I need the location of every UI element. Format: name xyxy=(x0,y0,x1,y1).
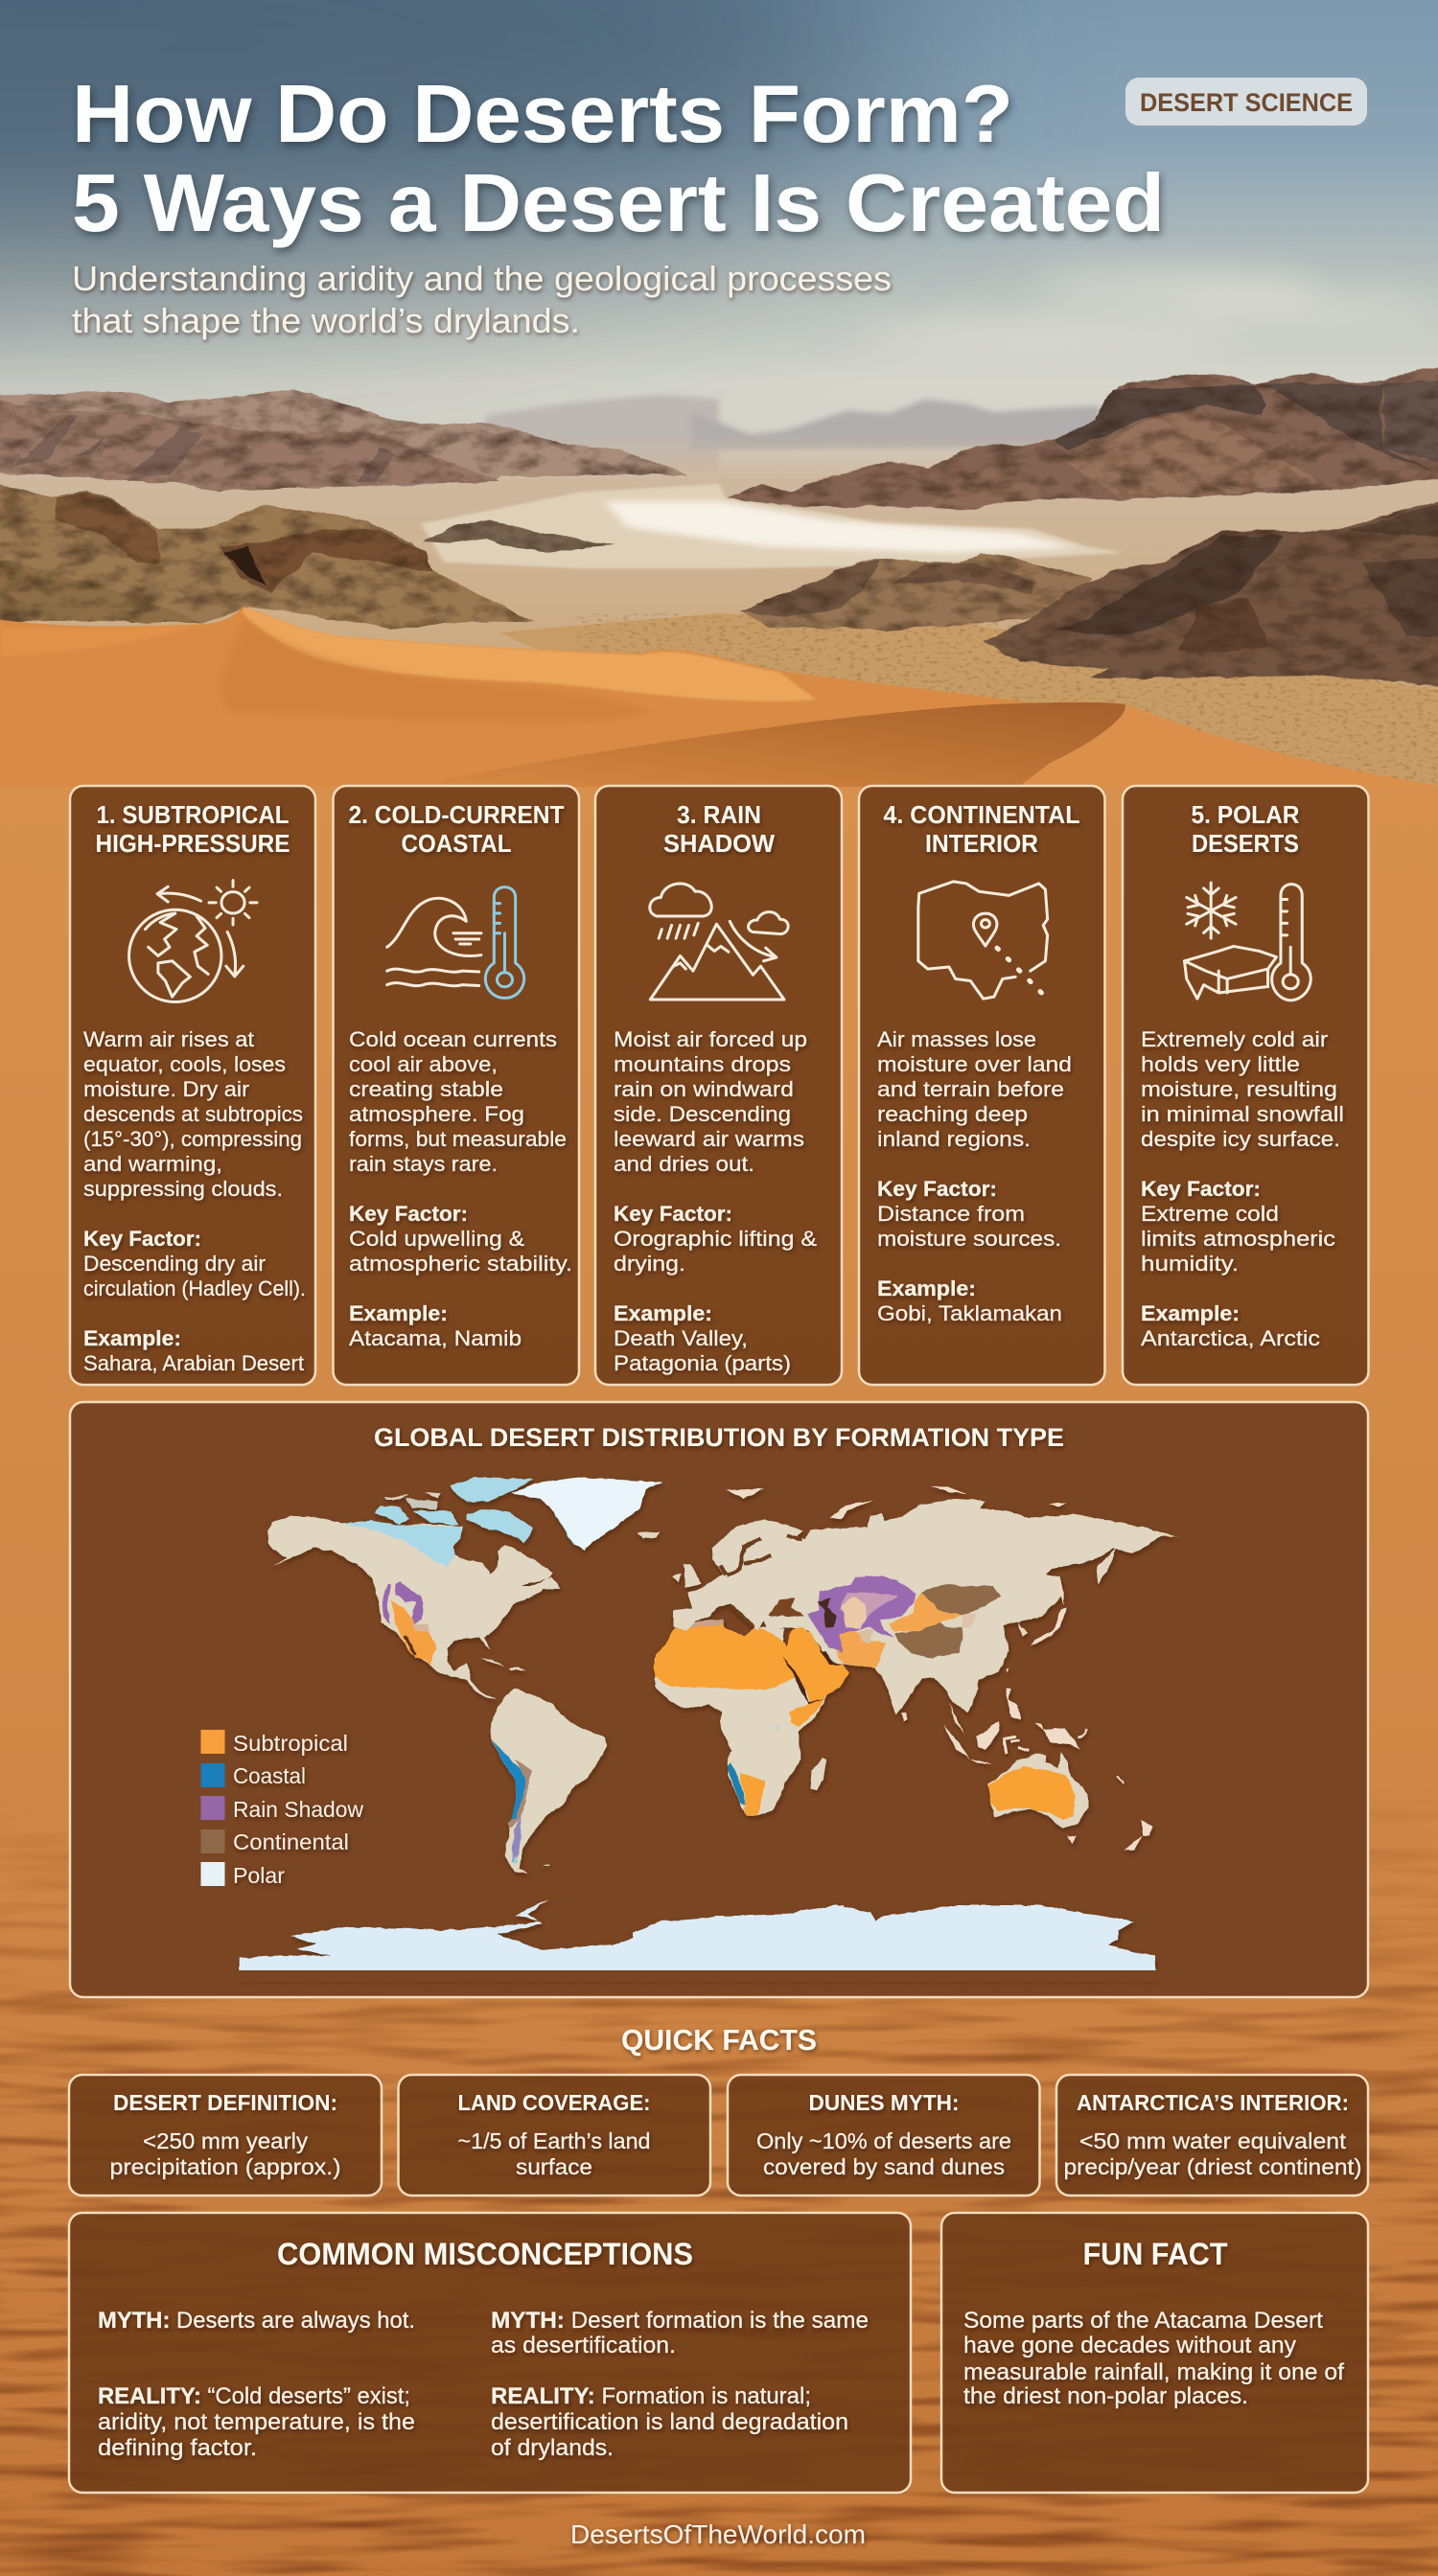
card heading xyxy=(663,800,775,858)
body text: Sahara, Arabian Desert xyxy=(83,1351,304,1375)
body text: Example: xyxy=(83,1326,181,1350)
card heading: 1. SUBTROPICAL xyxy=(96,800,290,829)
title: 5 Ways a Desert Is Created xyxy=(72,158,1165,249)
sand background xyxy=(0,787,1438,2576)
fun fact text: have gone decades without any xyxy=(963,2333,1296,2358)
icon: continent with location pin xyxy=(918,882,1048,999)
map heading: GLOBAL DESERT DISTRIBUTION BY FORMATION TYPE xyxy=(374,1423,1064,1452)
fun fact text: the driest non-polar places. xyxy=(963,2383,1248,2409)
body text: reaching deep xyxy=(877,1102,1028,1126)
card heading xyxy=(1191,800,1300,858)
stippled plain xyxy=(499,613,1438,736)
body text: Death Valley, xyxy=(614,1326,748,1350)
panel: 1 subtropical high-pressure xyxy=(70,786,315,1385)
body text: equator, cools, loses xyxy=(83,1052,286,1076)
footer: DesertsOfTheWorld.com xyxy=(570,2519,866,2549)
body text: Key Factor: xyxy=(1141,1177,1261,1201)
body text: forms, but measurable xyxy=(349,1127,567,1151)
card heading: 4. CONTINENTAL xyxy=(884,800,1080,829)
body text: limits atmospheric xyxy=(1141,1227,1335,1251)
body text: suppressing clouds. xyxy=(83,1177,283,1201)
map legend: Continental xyxy=(233,1829,349,1854)
title: How Do Deserts Form? xyxy=(72,69,1013,160)
body text: Moist air forced up xyxy=(614,1027,807,1051)
map legend: Rain Shadow xyxy=(233,1797,363,1822)
body text: atmospheric stability. xyxy=(349,1252,572,1276)
myth and reality text: desertification is land degradation xyxy=(491,2409,848,2435)
panel: 5 polar deserts xyxy=(1123,786,1369,1385)
panel: 2 cold-current coastal xyxy=(334,786,579,1385)
panel: antarctica's interior fact: <50 mm water equivalent xyxy=(1079,2128,1347,2153)
body text: holds very little xyxy=(1141,1052,1300,1076)
body text: inland regions. xyxy=(877,1127,1031,1151)
body text: Example: xyxy=(349,1301,448,1325)
fun fact heading: FUN FACT xyxy=(1083,2237,1228,2271)
body text: despite icy surface. xyxy=(1141,1127,1340,1151)
body text: Cold ocean currents xyxy=(349,1027,557,1051)
body text: Cold upwelling & xyxy=(349,1227,524,1251)
body text: creating stable xyxy=(349,1077,503,1101)
body text: descends at subtropics xyxy=(83,1102,303,1126)
icon: snowflake, ice and thermometer xyxy=(1185,883,1310,1000)
body text xyxy=(83,1027,306,1375)
title xyxy=(72,69,1165,249)
body text: Extreme cold xyxy=(1141,1202,1279,1226)
africa xyxy=(655,1619,827,1816)
body text: moisture sources. xyxy=(877,1227,1061,1251)
panel: desert definition fact: precipitation (approx.) xyxy=(109,2154,341,2179)
map legend: Subtropical xyxy=(233,1731,348,1756)
body text: and dries out. xyxy=(614,1152,754,1176)
body text: Air masses lose xyxy=(877,1027,1036,1051)
panel: antarctica's interior fact xyxy=(1056,2075,1368,2196)
body text: circulation (Hadley Cell). xyxy=(83,1276,306,1300)
body text: rain on windward xyxy=(614,1077,794,1101)
panel: desert definition fact xyxy=(69,2075,382,2196)
body text xyxy=(877,1027,1072,1325)
panel: desert definition fact: DESERT DEFINITION: xyxy=(113,2090,337,2115)
body text: Example: xyxy=(877,1276,976,1300)
myth and reality text: MYTH: Deserts are always hot. xyxy=(98,2308,415,2334)
body text: side. Descending xyxy=(614,1102,791,1126)
icon: wave and thermometer xyxy=(387,887,524,998)
body text: atmosphere. Fog xyxy=(349,1102,524,1126)
card heading: INTERIOR xyxy=(925,829,1038,858)
panel: 3 rain shadow xyxy=(595,786,842,1385)
card background xyxy=(334,786,579,1385)
panel: antarctica's interior fact: ANTARCTICA’S INTERIOR: xyxy=(1077,2090,1349,2115)
myth and reality text: REALITY: Formation is natural; xyxy=(491,2383,811,2409)
oceania xyxy=(988,1723,1153,1851)
card heading xyxy=(96,800,290,858)
body text: humidity. xyxy=(1141,1252,1239,1276)
card background xyxy=(859,786,1104,1385)
far haze ridges xyxy=(486,395,1100,474)
body text xyxy=(1141,1027,1344,1350)
subtitle: that shape the world’s drylands. xyxy=(72,301,580,340)
fun fact text xyxy=(963,2308,1344,2409)
map legend xyxy=(201,1730,363,1888)
body text: Distance from xyxy=(877,1202,1025,1226)
badge: desert science xyxy=(1125,78,1367,126)
panel: 4 continental interior xyxy=(859,786,1104,1385)
panel: land coverage fact: LAND COVERAGE: xyxy=(458,2090,650,2115)
body text: mountains drops xyxy=(614,1052,791,1076)
map legend: Polar xyxy=(233,1863,285,1888)
panel: dunes myth fact: covered by sand dunes xyxy=(763,2154,1005,2179)
badge: desert science: DESERT SCIENCE xyxy=(1140,88,1353,117)
misconceptions heading: COMMON MISCONCEPTIONS xyxy=(277,2237,693,2271)
card heading: COASTAL xyxy=(401,829,512,858)
body text: drying. xyxy=(614,1252,685,1276)
body text xyxy=(349,1027,572,1350)
eurasia xyxy=(672,1486,1178,1764)
panel: fun fact xyxy=(941,2213,1368,2493)
rock masses xyxy=(0,366,1438,690)
body text: Key Factor: xyxy=(349,1202,468,1226)
myth and reality text: aridity, not temperature, is the xyxy=(98,2409,415,2435)
body text: in minimal snowfall xyxy=(1141,1102,1344,1126)
body text: Extremely cold air xyxy=(1141,1027,1328,1051)
americas and greenland xyxy=(267,1478,663,1874)
body text: leeward air warms xyxy=(614,1127,804,1151)
body text: Antarctica, Arctic xyxy=(1141,1326,1320,1350)
panel: antarctica's interior fact: precip/year (driest continent) xyxy=(1064,2154,1361,2179)
subtitle: Understanding aridity and the geological processes xyxy=(72,259,892,298)
panel: land coverage fact: surface xyxy=(516,2154,592,2179)
card heading: SHADOW xyxy=(663,829,775,858)
myth and reality text xyxy=(98,2308,869,2461)
salt flat xyxy=(421,484,1123,568)
panel: dunes myth fact: Only ~10% of deserts are xyxy=(756,2128,1011,2153)
card background xyxy=(595,786,842,1385)
body text: (15°-30°), compressing xyxy=(83,1127,302,1151)
body text: moisture. Dry air xyxy=(83,1077,249,1101)
antarctica xyxy=(239,1898,1156,1978)
panel: dunes myth fact: DUNES MYTH: xyxy=(809,2090,959,2115)
body text: Key Factor: xyxy=(614,1202,732,1226)
panel: land coverage fact: ~1/5 of Earth’s land xyxy=(458,2128,650,2153)
body text: and warming, xyxy=(83,1152,222,1176)
icon: globe and sun xyxy=(129,881,257,1001)
quick facts heading: QUICK FACTS xyxy=(621,2023,817,2057)
body text: Descending dry air xyxy=(83,1252,266,1276)
card heading: DESERTS xyxy=(1192,829,1299,858)
body text: moisture over land xyxy=(877,1052,1072,1076)
hero desert landscape xyxy=(0,0,1438,798)
body text: Key Factor: xyxy=(877,1177,997,1201)
body text: Orographic lifting & xyxy=(614,1227,817,1251)
myth and reality text: REALITY: “Cold deserts” exist; xyxy=(98,2383,410,2409)
myth and reality text: as desertification. xyxy=(491,2333,676,2358)
card background xyxy=(70,786,315,1385)
card heading: 3. RAIN xyxy=(677,800,761,829)
panel: common misconceptions xyxy=(69,2213,911,2493)
body text: Warm air rises at xyxy=(83,1027,254,1051)
body text: Key Factor: xyxy=(83,1227,201,1251)
body text: Example: xyxy=(614,1301,712,1325)
panel: global distribution map xyxy=(70,1402,1368,1997)
body text: Example: xyxy=(1141,1301,1240,1325)
body text: Gobi, Taklamakan xyxy=(877,1301,1062,1325)
card heading xyxy=(884,800,1080,858)
body text xyxy=(614,1027,817,1375)
card heading xyxy=(349,800,565,858)
icon: cloud and mountains xyxy=(650,884,788,1000)
map legend: Coastal xyxy=(233,1763,306,1788)
myth and reality text: MYTH: Desert formation is the same xyxy=(491,2308,869,2334)
subtitle xyxy=(72,259,892,340)
body text: and terrain before xyxy=(877,1077,1064,1101)
card background xyxy=(1123,786,1369,1385)
myth and reality text: of drylands. xyxy=(491,2435,614,2461)
world map xyxy=(239,1478,1178,1978)
body text: Patagonia (parts) xyxy=(614,1351,791,1375)
card heading: 5. POLAR xyxy=(1191,800,1300,829)
myth and reality text: defining factor. xyxy=(98,2435,257,2461)
map panel background xyxy=(70,1402,1368,1997)
card heading: HIGH-PRESSURE xyxy=(96,829,290,858)
card heading: 2. COLD-CURRENT xyxy=(349,800,565,829)
fun fact text: Some parts of the Atacama Desert xyxy=(963,2308,1323,2334)
body text: rain stays rare. xyxy=(349,1152,498,1176)
panel: dunes myth fact xyxy=(728,2075,1039,2196)
body text: moisture, resulting xyxy=(1141,1077,1337,1101)
panel: land coverage fact xyxy=(399,2075,710,2196)
body text: Atacama, Namib xyxy=(349,1326,522,1350)
dunes xyxy=(0,607,1032,798)
fun fact text: measurable rainfall, making it one of xyxy=(963,2359,1344,2385)
body text: cool air above, xyxy=(349,1052,498,1076)
panel: desert definition fact: <250 mm yearly xyxy=(143,2128,309,2153)
